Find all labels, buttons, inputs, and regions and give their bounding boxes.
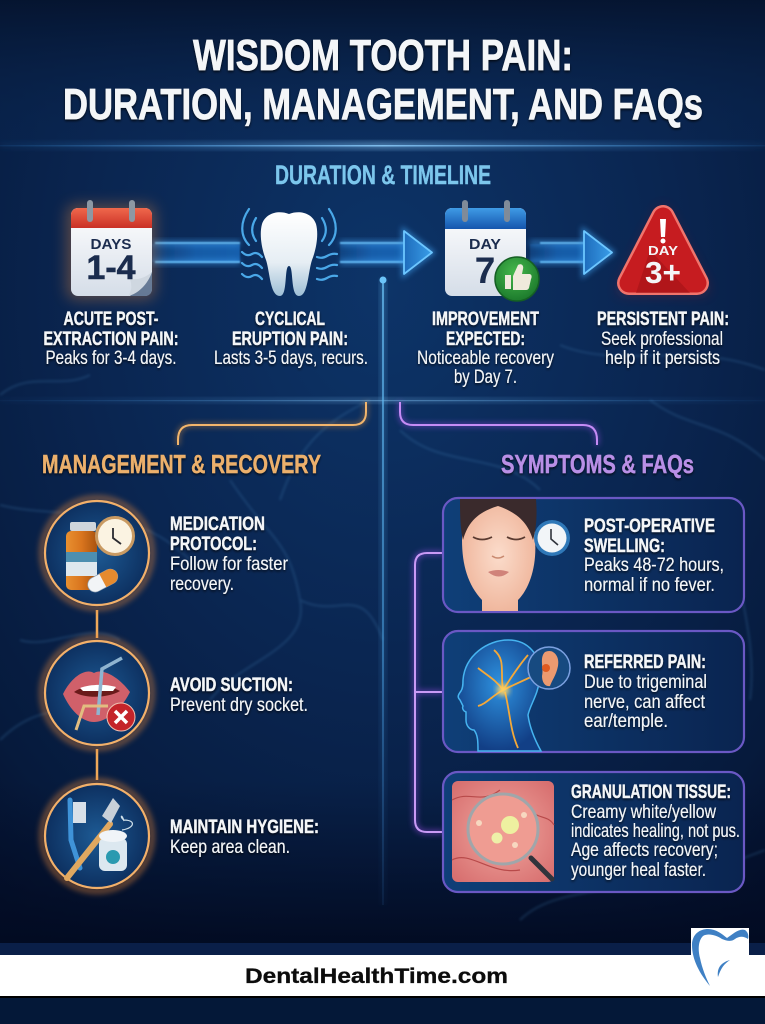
text: avoid suction: Prevent dry socket. xyxy=(170,695,308,716)
step connectors xyxy=(96,610,98,780)
footer xyxy=(0,943,765,1024)
text: improvement expected: IMPROVEMENT xyxy=(432,309,539,330)
text: cyclical eruption pain xyxy=(214,309,368,369)
text: referred: Due to trigeminal xyxy=(584,672,707,693)
text: referred: REFERRED PAIN: xyxy=(584,652,706,673)
icon: calendar days 1-4 xyxy=(66,200,156,300)
text: granulation: Creamy white/yellow xyxy=(571,802,716,823)
icon: calendar day 7 with thumb up: DAY xyxy=(469,236,501,253)
text: swelling xyxy=(584,516,724,596)
text: medication protocol xyxy=(170,514,289,595)
text: granulation: younger heal faster. xyxy=(571,860,706,881)
timeline arrows xyxy=(152,231,612,274)
text: granulation xyxy=(571,782,740,881)
text: swelling: SWELLING: xyxy=(584,536,665,557)
icon: medication protocol xyxy=(42,498,152,608)
vertical connector xyxy=(380,276,386,905)
icon: tooth with pain waves xyxy=(242,209,337,296)
text: persistent pain: help if it persists xyxy=(605,348,720,369)
icon: warning triangle day 3+: 3+ xyxy=(645,255,681,290)
text: referred: nerve, can affect xyxy=(584,692,706,713)
text: acute post-extraction pain: ACUTE POST- xyxy=(64,309,158,330)
divider glow xyxy=(0,142,765,403)
text: swelling: Peaks 48-72 hours, xyxy=(584,555,724,576)
branch connector: symptoms xyxy=(400,402,597,445)
icon: head with nerve and ear xyxy=(458,640,570,751)
text: medication protocol: MEDICATION xyxy=(170,514,265,535)
text: improvement expected xyxy=(417,309,554,388)
text: avoid suction: AVOID SUCTION: xyxy=(170,675,293,696)
text: referred xyxy=(584,652,707,732)
heading: management and recovery: MANAGEMENT & RECOVERY xyxy=(42,449,321,479)
text: improvement expected: EXPECTED: xyxy=(446,329,525,350)
icon: magnified tissue xyxy=(452,781,554,882)
icon: warning triangle day 3+ xyxy=(618,206,708,293)
heading: duration and timeline: DURATION & TIMELINE xyxy=(275,160,491,190)
text: improvement expected: Noticeable recovery xyxy=(417,348,554,369)
text: cyclical eruption pain: CYCLICAL xyxy=(255,309,325,330)
icon: calendar days 1-4: DAYS xyxy=(90,236,132,253)
text: cyclical eruption pain: Lasts 3-5 days, recurs. xyxy=(214,348,368,369)
text: acute post-extraction pain: EXTRACTION PAIN: xyxy=(44,329,178,350)
title: WISDOM TOOTH PAIN: xyxy=(193,31,573,80)
text: acute post-extraction pain: Peaks for 3-4 days. xyxy=(46,348,176,369)
icon: calendar days 1-4: 1-4 xyxy=(86,249,136,287)
logo: tooth xyxy=(691,928,749,986)
text: granulation: Age affects recovery; xyxy=(571,840,718,861)
text: persistent pain: Seek professional xyxy=(601,329,723,350)
footer url: DentalHealthTime.com xyxy=(245,965,508,988)
text: cyclical eruption pain: ERUPTION PAIN: xyxy=(232,329,348,350)
icon: avoid suction xyxy=(42,638,152,748)
text: improvement expected: by Day 7. xyxy=(454,367,517,388)
panel: granulation tissue xyxy=(443,772,744,892)
icon: calendar day 7 with thumb up xyxy=(445,200,539,301)
branch connector: management xyxy=(178,402,366,445)
icon: calendar day 7 with thumb up: 7 xyxy=(475,250,495,291)
icon: maintain hygiene xyxy=(42,781,152,891)
symptom connector xyxy=(415,553,443,832)
icon: swollen face xyxy=(460,499,570,611)
text: persistent pain xyxy=(597,309,729,369)
text: medication protocol: Follow for faster xyxy=(170,554,289,575)
text: swelling: POST-OPERATIVE xyxy=(584,516,715,537)
heading: symptoms and faqs: SYMPTOMS & FAQs xyxy=(501,449,694,479)
icon: warning triangle day 3+: DAY xyxy=(648,243,678,258)
panel: referred pain xyxy=(443,631,744,752)
panel: post-operative swelling xyxy=(443,498,744,612)
text: maintain hygiene: Keep area clean. xyxy=(170,837,290,858)
text: maintain hygiene xyxy=(170,817,319,858)
title xyxy=(63,31,703,129)
text: referred: ear/temple. xyxy=(584,711,668,732)
text: swelling: normal if no fever. xyxy=(584,575,715,596)
text: maintain hygiene: MAINTAIN HYGIENE: xyxy=(170,817,319,838)
text: avoid suction xyxy=(170,675,308,716)
text: medication protocol: recovery. xyxy=(170,574,234,595)
panel: management steps xyxy=(42,498,152,891)
text: medication protocol: PROTOCOL: xyxy=(170,534,257,555)
text: acute post-extraction pain xyxy=(44,309,178,369)
